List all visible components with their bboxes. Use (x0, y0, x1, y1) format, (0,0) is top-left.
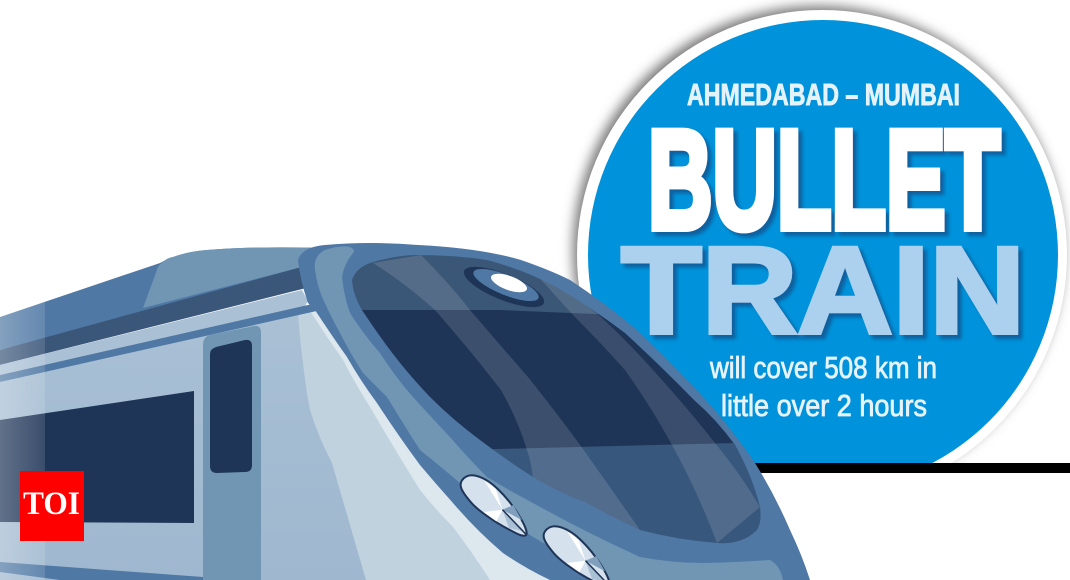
nose highlight bright (310, 308, 550, 580)
windscreen (352, 255, 760, 544)
logo: TOI (20, 471, 84, 541)
badge blue disc (588, 20, 1058, 490)
caption line 2: little over 2 hours (721, 388, 927, 423)
nose rim (298, 243, 810, 580)
door panel (203, 326, 261, 580)
panel: circular title badge (573, 6, 1070, 500)
side window (0, 391, 194, 523)
route label: AHMEDABAD – MUMBAI (687, 77, 960, 112)
badge white ring (577, 10, 1067, 500)
front lamp left (454, 468, 539, 541)
blue roof stripe (0, 300, 330, 382)
lower skirt stripe (0, 562, 203, 580)
nose light strip (315, 246, 783, 580)
light roof stripe (0, 290, 308, 375)
headlight (459, 259, 549, 315)
illustration: bullet train (0, 240, 810, 580)
roof (0, 247, 330, 350)
badge shadow (573, 6, 1063, 496)
carriage end fade (0, 300, 45, 580)
heading: TRAIN: TRAIN (621, 222, 1025, 360)
nose highlight mid (298, 308, 550, 580)
caption line 1: will cover 508 km in (709, 350, 937, 385)
front lamp right (537, 519, 622, 580)
train body (0, 300, 550, 580)
dark roof stripe (0, 260, 330, 365)
black rule under badge (740, 463, 1070, 473)
roof light panel (143, 247, 330, 308)
logo: TOI: TOI (23, 486, 80, 522)
door window (210, 340, 252, 473)
